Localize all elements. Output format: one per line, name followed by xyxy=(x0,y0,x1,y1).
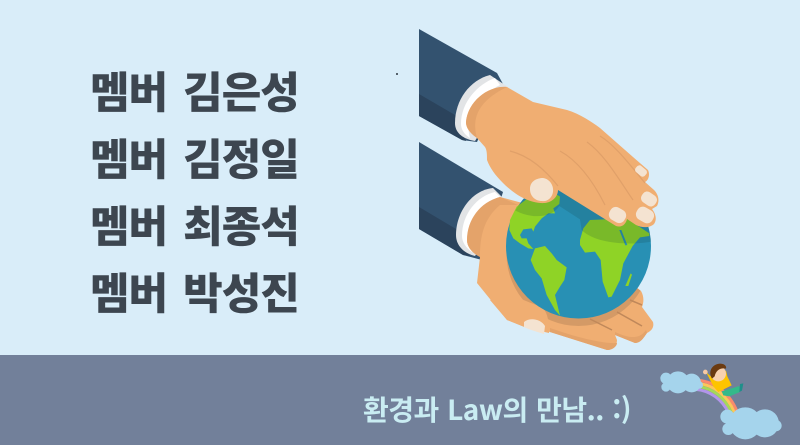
speck xyxy=(396,73,398,75)
globe xyxy=(506,190,651,318)
upper sleeve xyxy=(419,29,503,142)
hand shadow on globe xyxy=(516,190,651,244)
tagline: 환경과 Law의 만남.. :) xyxy=(363,389,631,429)
globe shadow on palm xyxy=(506,256,640,326)
right cloud xyxy=(720,407,782,439)
child xyxy=(703,364,743,396)
lower sleeve xyxy=(419,142,503,260)
lower hand xyxy=(467,182,653,350)
upper cuff xyxy=(455,75,508,141)
icon: child on rainbow between clouds xyxy=(660,364,782,439)
member name 2: 멤버 김정일 xyxy=(90,126,299,188)
member list xyxy=(90,59,299,322)
lower thumb nail xyxy=(524,319,545,334)
lower cuff xyxy=(456,188,510,256)
rainbow xyxy=(696,380,737,412)
member name 4: 멤버 박성진 xyxy=(90,260,299,322)
upper hand xyxy=(466,87,659,227)
member name 1: 멤버 김은성 xyxy=(90,59,299,121)
illustration: hands holding globe xyxy=(419,29,659,350)
continents xyxy=(509,193,649,316)
member name 3: 멤버 최종석 xyxy=(90,193,299,255)
fingernails xyxy=(530,164,659,226)
lower thumb xyxy=(490,293,549,333)
bottom band xyxy=(0,355,800,445)
left cloud xyxy=(660,371,703,393)
